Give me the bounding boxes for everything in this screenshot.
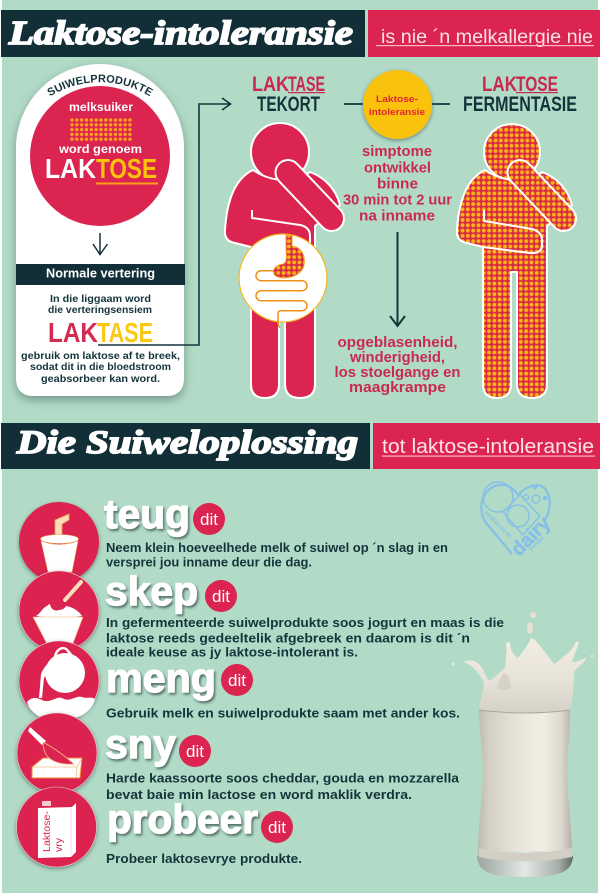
item 1: text	[106, 540, 448, 570]
heading: laktase tekort	[252, 73, 325, 116]
item 1: heading teug: dit	[200, 510, 218, 529]
text: symptoms	[334, 335, 460, 396]
connector lines	[344, 103, 450, 105]
item 2: heading skep: dit	[212, 587, 230, 606]
panel: normal digestion card	[10, 62, 190, 406]
subtitle banner	[368, 10, 600, 57]
logo: rediscover dairy: rediscover	[483, 510, 513, 540]
badge: dit	[179, 735, 211, 767]
arrow: symptoms	[390, 232, 405, 326]
text: symptom onset: simptome	[362, 144, 432, 160]
item 5: text: Probeer laktosevrye produkte.	[106, 851, 302, 866]
text: word genoem: word genoem	[58, 144, 142, 156]
heading: laktose: TOSE	[96, 153, 157, 184]
item 3: heading meng: meng	[106, 655, 216, 701]
pink circle	[30, 86, 170, 226]
heading: laktose: LAK	[45, 153, 96, 184]
text: symptom onset	[343, 144, 452, 224]
section heading: Die Suiweloplossing	[16, 425, 358, 461]
heading: laktase tekort: LAK	[252, 73, 289, 96]
text: enzyme description	[21, 350, 180, 385]
section subtitle banner	[373, 423, 600, 469]
item 4: icon knife and cheese	[17, 713, 97, 793]
text: enzyme description: gebruik om laktose af te breek,	[21, 350, 180, 362]
item 5: icon carton: Laktose-	[41, 810, 53, 852]
milk glass	[452, 612, 593, 877]
item 2: icon yogurt	[19, 571, 99, 651]
heading: laktase tekort: TEKORT	[257, 93, 320, 116]
item 3: heading meng: dit	[228, 671, 246, 690]
item 2: text: laktose reeds gedeeltelik afgebreek en daarom is dit ´n	[106, 630, 470, 646]
text: symptoms: los stoelgange en	[334, 365, 460, 381]
text: enzyme description: geabsorbeer kan word.	[41, 373, 160, 385]
arrow: connector from laktase to laktase tekort	[98, 98, 230, 345]
text: melksuiker: melksuiker	[69, 102, 134, 114]
text: enzyme description: sodat dit in die bloedstroom	[30, 361, 171, 373]
item 2: text: ideale keuse as jy laktose-intolerant is.	[106, 644, 358, 660]
item 2: text: In gefermenteerde suiwelprodukte soos jogurt en maas is die	[106, 615, 504, 630]
item 5: icon carton	[16, 787, 96, 867]
logo: rediscover dairy	[481, 482, 556, 561]
heading: laktase	[48, 317, 153, 348]
text: enzyme intro: die verteringsensiem	[48, 304, 152, 316]
figure: lactose fermentation person	[457, 124, 572, 398]
subtitle: is nie ´n melkallergie nie	[381, 27, 593, 48]
item 4: heading sny: sny	[105, 721, 176, 767]
yellow circle: laktose-intoleransie: intoleransie	[369, 107, 425, 118]
text: symptom onset: ontwikkel	[364, 160, 431, 176]
title: Laktose-intoleransie	[8, 15, 353, 52]
heading: laktose	[45, 153, 158, 184]
item 1: icon cup	[19, 502, 99, 582]
yellow circle: laktose-intoleransie: Laktose-	[376, 94, 418, 105]
text: symptoms: opgeblasenheid,	[338, 335, 458, 351]
icon: stomach	[273, 235, 304, 278]
item 4: heading sny	[105, 721, 211, 767]
section banner: die suiweloplossing	[1, 423, 370, 469]
item 5: heading probeer: probeer	[107, 796, 258, 842]
item 2: text	[106, 615, 504, 660]
item 1: heading teug: teug	[104, 491, 190, 537]
heading: laktase: LAK	[48, 317, 98, 348]
item 4: text	[106, 770, 460, 802]
band: normale vertering	[16, 264, 185, 285]
text: symptom onset: na inname	[359, 208, 435, 224]
arrow: down	[93, 233, 108, 254]
text: symptom onset: 30 min tot 2 uur	[343, 192, 452, 208]
item 1: text: versprei jou inname deur die dag.	[106, 554, 312, 570]
heading: laktose fermentasie: TOSE	[516, 73, 558, 96]
logo: rediscover dairy: 3*4*DAY	[528, 535, 547, 553]
badge: dit	[261, 811, 293, 843]
badge: dit	[193, 503, 225, 535]
heading: laktose fermentasie: LAK	[482, 73, 517, 96]
icon: intestines	[256, 271, 307, 328]
text: symptoms: winderigheid,	[349, 350, 445, 366]
text: enzyme intro: In die liggaam word	[50, 293, 151, 305]
item 3: text: Gebruik melk en suiwelprodukte saam met ander kos.	[106, 706, 460, 720]
heading: laktase: TASE	[97, 317, 153, 348]
text: enzyme intro	[48, 293, 152, 316]
badge: dit	[221, 664, 253, 696]
item 4: heading sny: dit	[186, 742, 204, 761]
item 3: icon jug	[19, 641, 99, 721]
curved label: suiwelprodukte: SUIWELPRODUKTE	[47, 74, 154, 96]
heading: laktase tekort: TASE	[288, 73, 325, 96]
logo: rediscover dairy: dairy	[507, 512, 556, 561]
item 2: heading skep: skep	[105, 568, 198, 614]
item 5: icon carton: vry	[53, 837, 65, 852]
section subtitle: tot laktose-intoleransie	[382, 436, 594, 458]
text: symptom onset: binne	[377, 176, 418, 192]
text: normale vertering: Normale vertering	[46, 266, 155, 280]
item 5: heading probeer: dit	[268, 818, 286, 837]
figure: laktase deficiency person	[225, 123, 340, 398]
title banner	[1, 10, 365, 57]
item 4: text: Harde kaassoorte soos cheddar, gouda en mozzarella	[106, 770, 460, 786]
badge: dit	[205, 580, 237, 612]
yellow circle: laktose-intoleransie	[363, 70, 432, 139]
item 1: text: Neem klein hoeveelhede melk of suiwel op ´n slag in en	[106, 540, 448, 555]
inset: digestive system	[239, 234, 327, 328]
item 4: text: bevat baie min lactose en word maklik verdra.	[106, 787, 412, 802]
text: symptoms: maagkrampe	[349, 380, 446, 396]
heading: laktose fermentasie	[463, 73, 577, 116]
dot grid: sugar	[70, 118, 132, 142]
